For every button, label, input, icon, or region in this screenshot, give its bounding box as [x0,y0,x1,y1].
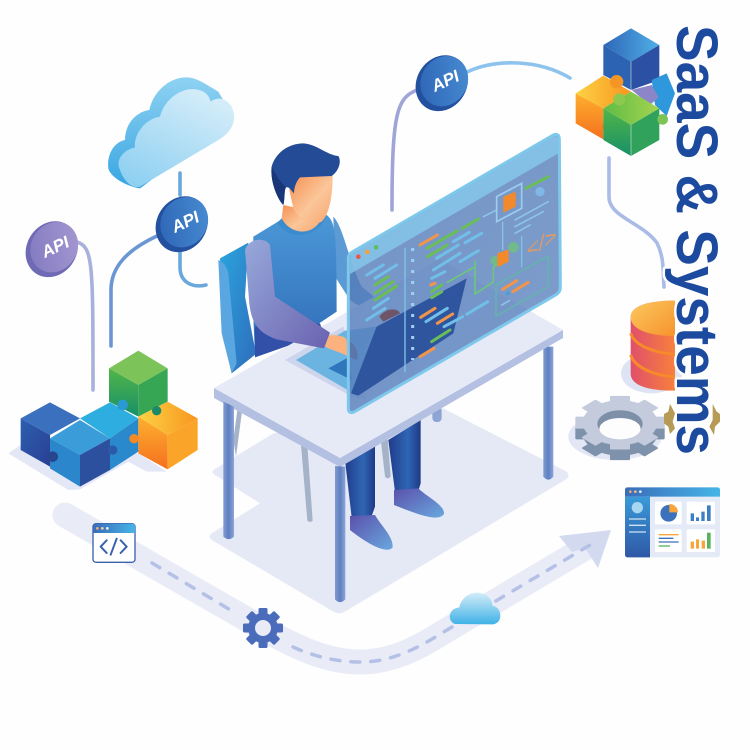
API badge: top: API [428,66,463,96]
laptop screen seen through monitor [351,278,467,396]
road dashes [152,545,590,662]
API badge: left: API [38,232,73,262]
monitor title band [350,136,558,274]
puzzle cubes: left cluster [8,351,198,490]
code symbol: </> [527,222,557,263]
icon: small gear on road [243,608,283,648]
window buttons [356,245,378,259]
icon: small cloud on road [450,593,500,624]
desk far right leg [543,347,553,480]
data pipeline road [65,515,611,662]
icon: large gear [568,396,665,460]
icon: database cylinder [621,301,682,393]
API badge: center: API [168,207,203,237]
icon: dashboard window [625,487,720,557]
chair [218,243,256,373]
code lines [367,177,548,372]
person: torso, head and rear arm [253,143,390,357]
API badge: top [405,45,478,121]
desk front legs [223,402,345,602]
gold fragments around title [664,404,720,435]
API badge: center [145,186,218,262]
floor shadow under desk [209,403,569,613]
icon: code window on road [93,524,135,562]
neck [282,205,322,232]
person: front arm and hand [245,240,358,360]
hand seen through monitor [379,309,400,322]
person: legs and shoes [345,420,444,550]
laptop [285,327,377,400]
icon: large cloud [108,77,234,188]
desk back legs [233,407,442,522]
puzzle cubes: top right cluster [576,28,675,156]
connector lines [77,63,664,390]
desk top [214,259,563,467]
flow diagram [447,183,548,316]
title: SaaS & Systems [664,25,729,455]
API badge: left [15,211,88,287]
road arrowhead [559,530,611,568]
holographic monitor [348,134,560,413]
hair [271,143,340,205]
face [289,175,333,223]
